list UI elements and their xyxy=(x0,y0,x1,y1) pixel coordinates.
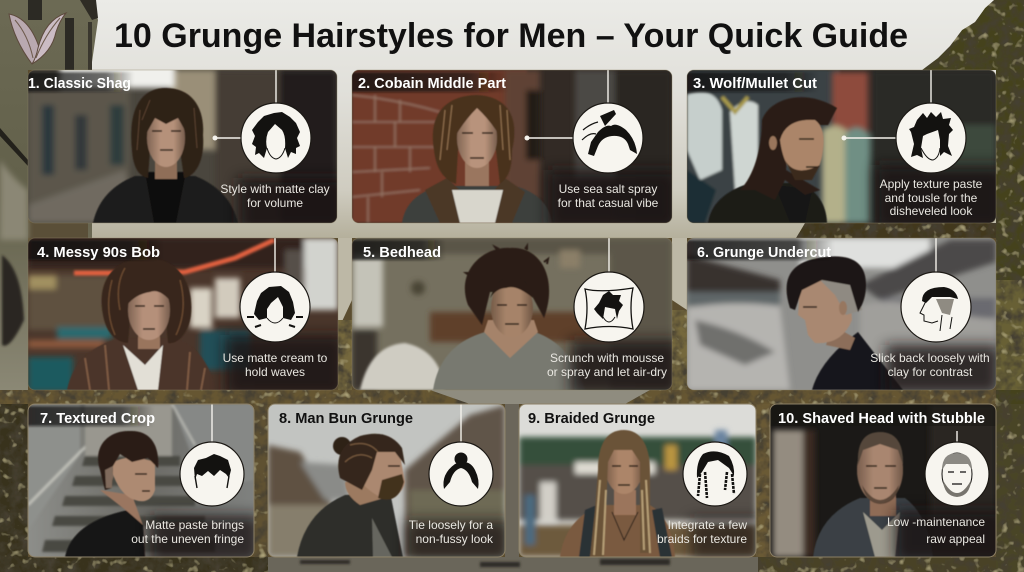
tip text: hold waves xyxy=(245,365,305,379)
callout lines xyxy=(215,70,276,138)
panel title: 9. Braided Grunge xyxy=(528,411,655,427)
tip text: Apply texture paste xyxy=(880,177,983,191)
tip text: Use sea salt spray xyxy=(559,182,657,196)
tip text: Slick back loosely with xyxy=(870,351,990,365)
icon: comb and middle part hair xyxy=(573,103,643,173)
photo: diner and man with wavy bob xyxy=(28,238,338,392)
panel: 9. Braided Grunge xyxy=(519,404,760,560)
tip text xyxy=(409,518,494,546)
panel: 6. Grunge Undercut xyxy=(684,238,1000,395)
tip text xyxy=(870,351,990,379)
photo: alley and young man with shag xyxy=(28,60,337,223)
panel title: 3. Wolf/Mullet Cut xyxy=(693,76,817,92)
icon: man bun xyxy=(429,442,493,506)
callout lines xyxy=(527,70,608,138)
tip text: for that casual vibe xyxy=(558,196,659,210)
icon: shaved head with beard xyxy=(925,442,989,506)
panel title: 1. Classic Shag xyxy=(28,76,131,92)
panel title: 7. Textured Crop xyxy=(40,411,155,427)
tip text xyxy=(657,518,747,546)
photo: brick wall and man with middle part xyxy=(352,70,672,223)
photo: skatepark and man with undercut xyxy=(687,238,996,390)
callout lines xyxy=(935,238,937,272)
tip text xyxy=(547,351,667,379)
tip text: Style with matte clay xyxy=(220,182,330,196)
panel title: 2. Cobain Middle Part xyxy=(358,76,506,92)
tip text: Integrate a few xyxy=(668,518,747,532)
photo: rocky landscape and man with bun xyxy=(268,404,505,557)
panel: 7. Textured Crop xyxy=(24,404,260,563)
tip text: and tousle for the xyxy=(885,191,978,205)
photo: graffiti wall and man with mullet xyxy=(687,70,996,223)
logo: stylised V of leaves xyxy=(9,13,66,64)
callout lines xyxy=(274,238,276,272)
panel: 10. Shaved Head with Stubble xyxy=(770,404,1005,562)
icon: wavy bob with arrows xyxy=(240,272,310,342)
panel title: 10. Shaved Head with Stubble xyxy=(778,411,985,427)
tip text: Tie loosely for a xyxy=(409,518,493,532)
panel title: 6. Grunge Undercut xyxy=(697,245,831,261)
tip text: non-fussy look xyxy=(416,532,494,546)
photo: festival crowd and man with braids xyxy=(519,404,756,557)
photo: dark doorway and man with shaved head xyxy=(770,404,996,557)
icon: wolf mullet hair xyxy=(896,103,966,173)
icon: shaggy hair xyxy=(241,103,311,173)
tip text: Scrunch with mousse xyxy=(550,351,664,365)
icon: pillow with messy hair xyxy=(574,272,644,342)
tip text: clay for contrast xyxy=(888,365,973,379)
tip text: Use matte cream to xyxy=(223,351,328,365)
icon: textured crop hair xyxy=(180,442,244,506)
tip text: raw appeal xyxy=(926,532,985,546)
tip text xyxy=(223,351,328,379)
tip text: or spray and let air-dry xyxy=(547,365,667,379)
callout lines xyxy=(956,431,958,442)
panel: 3. Wolf/Mullet Cut xyxy=(684,70,1005,230)
tip text: Matte paste brings xyxy=(145,518,244,532)
photo: worn bedroom and man with tousled hair xyxy=(352,238,672,390)
icon: braids xyxy=(683,442,747,506)
tip text xyxy=(220,182,330,210)
panel: 1. Classic Shag xyxy=(28,70,337,223)
tip text: for volume xyxy=(247,196,303,210)
tip text: disheveled look xyxy=(890,204,973,218)
tip text xyxy=(558,182,659,210)
tip text xyxy=(131,518,244,546)
panel: 4. Messy 90s Bob xyxy=(24,238,345,397)
panel title: 5. Bedhead xyxy=(363,245,441,261)
callout lines xyxy=(608,238,610,272)
callout lines xyxy=(844,70,931,138)
tip text: braids for texture xyxy=(657,532,747,546)
tip text xyxy=(880,177,983,218)
callout lines xyxy=(460,404,462,442)
icon: undercut profile xyxy=(901,272,971,342)
title: 10 Grunge Hairstyles for Men – Your Quick Guide xyxy=(114,17,908,55)
panel title: 4. Messy 90s Bob xyxy=(37,245,160,261)
panel: 8. Man Bun Grunge xyxy=(268,404,510,562)
panel title: 8. Man Bun Grunge xyxy=(279,411,413,427)
tip text: Low -maintenance xyxy=(887,515,985,529)
panel: 2. Cobain Middle Part xyxy=(348,70,678,230)
panel: 5. Bedhead xyxy=(348,238,680,395)
tip text: out the uneven fringe xyxy=(131,532,244,546)
callout lines xyxy=(211,404,213,442)
photo: concrete stairwell and man with textured crop xyxy=(28,404,254,557)
tip text xyxy=(887,515,985,546)
